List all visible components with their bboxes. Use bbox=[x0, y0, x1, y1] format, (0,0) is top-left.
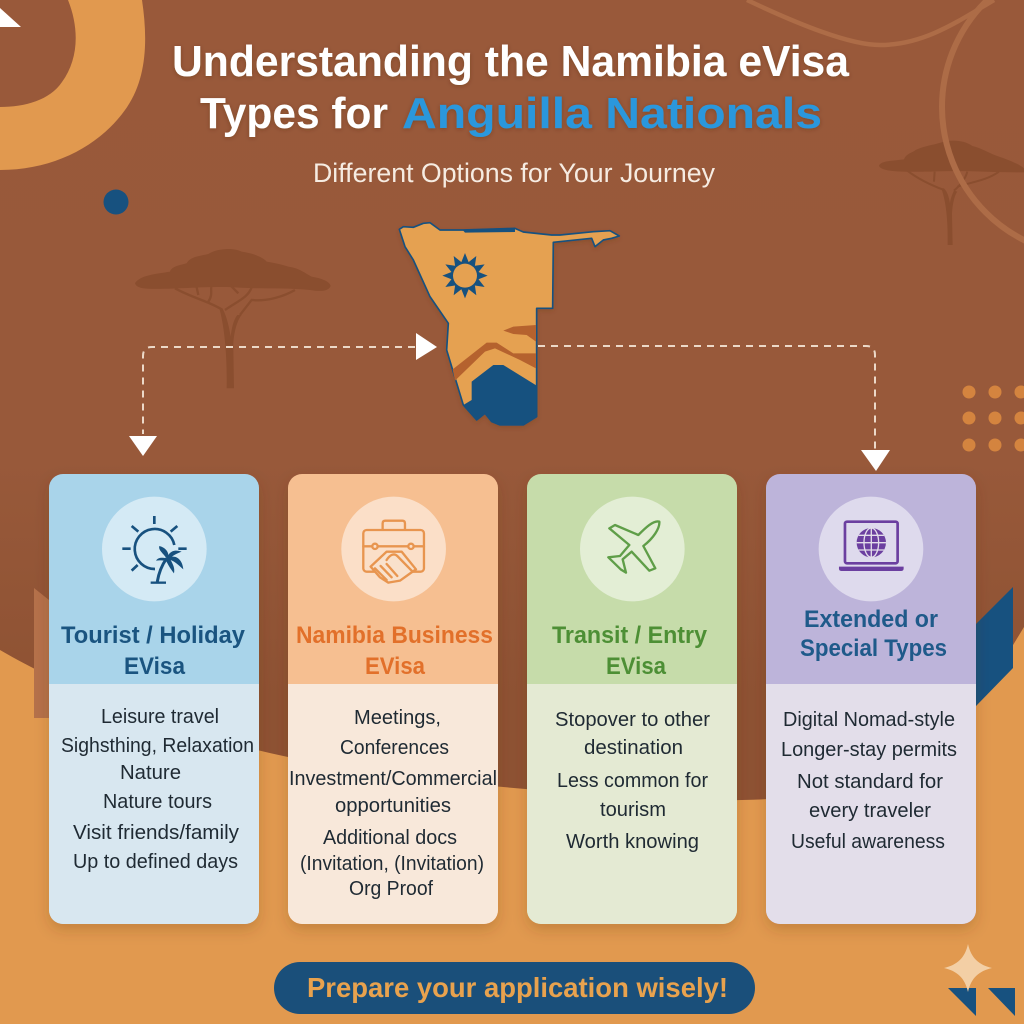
subtitle: Different Options for Your Journey bbox=[313, 158, 715, 188]
dashed connector left bbox=[143, 347, 415, 434]
list: tourist: Up to defined days bbox=[73, 851, 238, 873]
list: business: Org Proof bbox=[349, 878, 433, 900]
list: business: Conferences bbox=[340, 737, 449, 759]
panel body: tourist bbox=[49, 684, 259, 924]
decorative curve top right bbox=[747, 0, 994, 45]
heading: tourist: EVisa bbox=[124, 653, 186, 680]
decorative ring top right bbox=[942, 0, 1024, 256]
heading: tourist: Tourist / Holiday bbox=[61, 622, 246, 649]
list: special types: Not standard for bbox=[797, 771, 943, 793]
map of Namibia bbox=[399, 223, 619, 425]
call to action button: Prepare your application wisely! bbox=[307, 972, 728, 1003]
list: transit: Stopover to other bbox=[555, 709, 710, 731]
decorative block right bbox=[976, 587, 1013, 706]
list: special types: every traveler bbox=[809, 800, 931, 822]
heading: tourist bbox=[61, 622, 246, 680]
icon: airplane bbox=[580, 497, 685, 601]
heading: business: EVisa bbox=[365, 653, 426, 680]
decorative arc top left bbox=[0, 0, 145, 170]
decorative sparkle bbox=[944, 944, 992, 992]
list: special types: Longer-stay permits bbox=[781, 739, 957, 761]
title bbox=[172, 37, 850, 138]
icon: laptop with globe bbox=[819, 497, 923, 601]
heading: transit bbox=[552, 622, 708, 680]
arrow: down to tourist card bbox=[129, 436, 157, 456]
icon: sun and palm bbox=[102, 497, 207, 601]
arrow: down to special types card bbox=[861, 450, 890, 471]
wave: orange ground bbox=[0, 627, 1024, 1024]
heading: business bbox=[296, 622, 493, 680]
list: transit: destination bbox=[584, 737, 683, 759]
list: special types: Useful awareness bbox=[791, 831, 945, 853]
heading: special types bbox=[800, 606, 947, 662]
dashed connector right bbox=[538, 346, 875, 450]
list: tourist: Nature bbox=[120, 762, 181, 784]
list: special types bbox=[781, 709, 957, 853]
acacia tree right bbox=[879, 141, 1024, 245]
list: transit: Less common for bbox=[557, 770, 708, 792]
list: business: Meetings, bbox=[354, 707, 441, 729]
decorative dot bbox=[104, 190, 128, 214]
list: business: Additional docs bbox=[323, 827, 457, 849]
title: Types for bbox=[200, 89, 388, 138]
list: business: Investment/Commercial bbox=[289, 768, 497, 790]
panel: business bbox=[288, 474, 498, 924]
title: Anguilla Nationals bbox=[402, 89, 822, 138]
decorative block left bbox=[34, 588, 49, 718]
list: tourist: Nature tours bbox=[103, 791, 212, 813]
decorative triangle top left bbox=[0, 8, 21, 27]
panel: tourist bbox=[49, 474, 259, 924]
heading: business: Namibia Business bbox=[296, 622, 493, 649]
list: tourist: Sighsthing, Relaxation bbox=[61, 735, 254, 757]
list: business: (Invitation, (Invitation) bbox=[300, 853, 484, 875]
heading: special types: Special Types bbox=[800, 635, 947, 662]
heading: transit: Transit / Entry bbox=[552, 622, 708, 649]
list: special types: Digital Nomad-style bbox=[783, 709, 955, 731]
panel: transit bbox=[527, 474, 737, 924]
call to action button bbox=[274, 962, 755, 1014]
list: business: opportunities bbox=[335, 795, 451, 817]
list: tourist: Leisure travel bbox=[101, 706, 219, 728]
icon: briefcase and handshake bbox=[341, 497, 446, 601]
heading: transit: EVisa bbox=[606, 653, 667, 680]
acacia tree left bbox=[135, 249, 331, 388]
list: business bbox=[289, 707, 497, 900]
decorative triangles bottom right bbox=[948, 988, 1015, 1016]
list: transit bbox=[555, 709, 710, 853]
decorative dot grid bbox=[962, 386, 1024, 452]
heading: special types: Extended or bbox=[804, 606, 938, 633]
list: tourist: Visit friends/family bbox=[73, 822, 239, 844]
panel body: business bbox=[288, 684, 498, 924]
arrow: pointing to map bbox=[416, 333, 437, 360]
list: tourist bbox=[61, 706, 254, 873]
panel body: special types bbox=[766, 684, 976, 924]
panel body: transit bbox=[527, 684, 737, 924]
title: Understanding the Namibia eVisa bbox=[172, 37, 850, 86]
list: transit: tourism bbox=[600, 799, 666, 821]
list: transit: Worth knowing bbox=[566, 831, 699, 853]
panel: special types bbox=[766, 474, 976, 924]
